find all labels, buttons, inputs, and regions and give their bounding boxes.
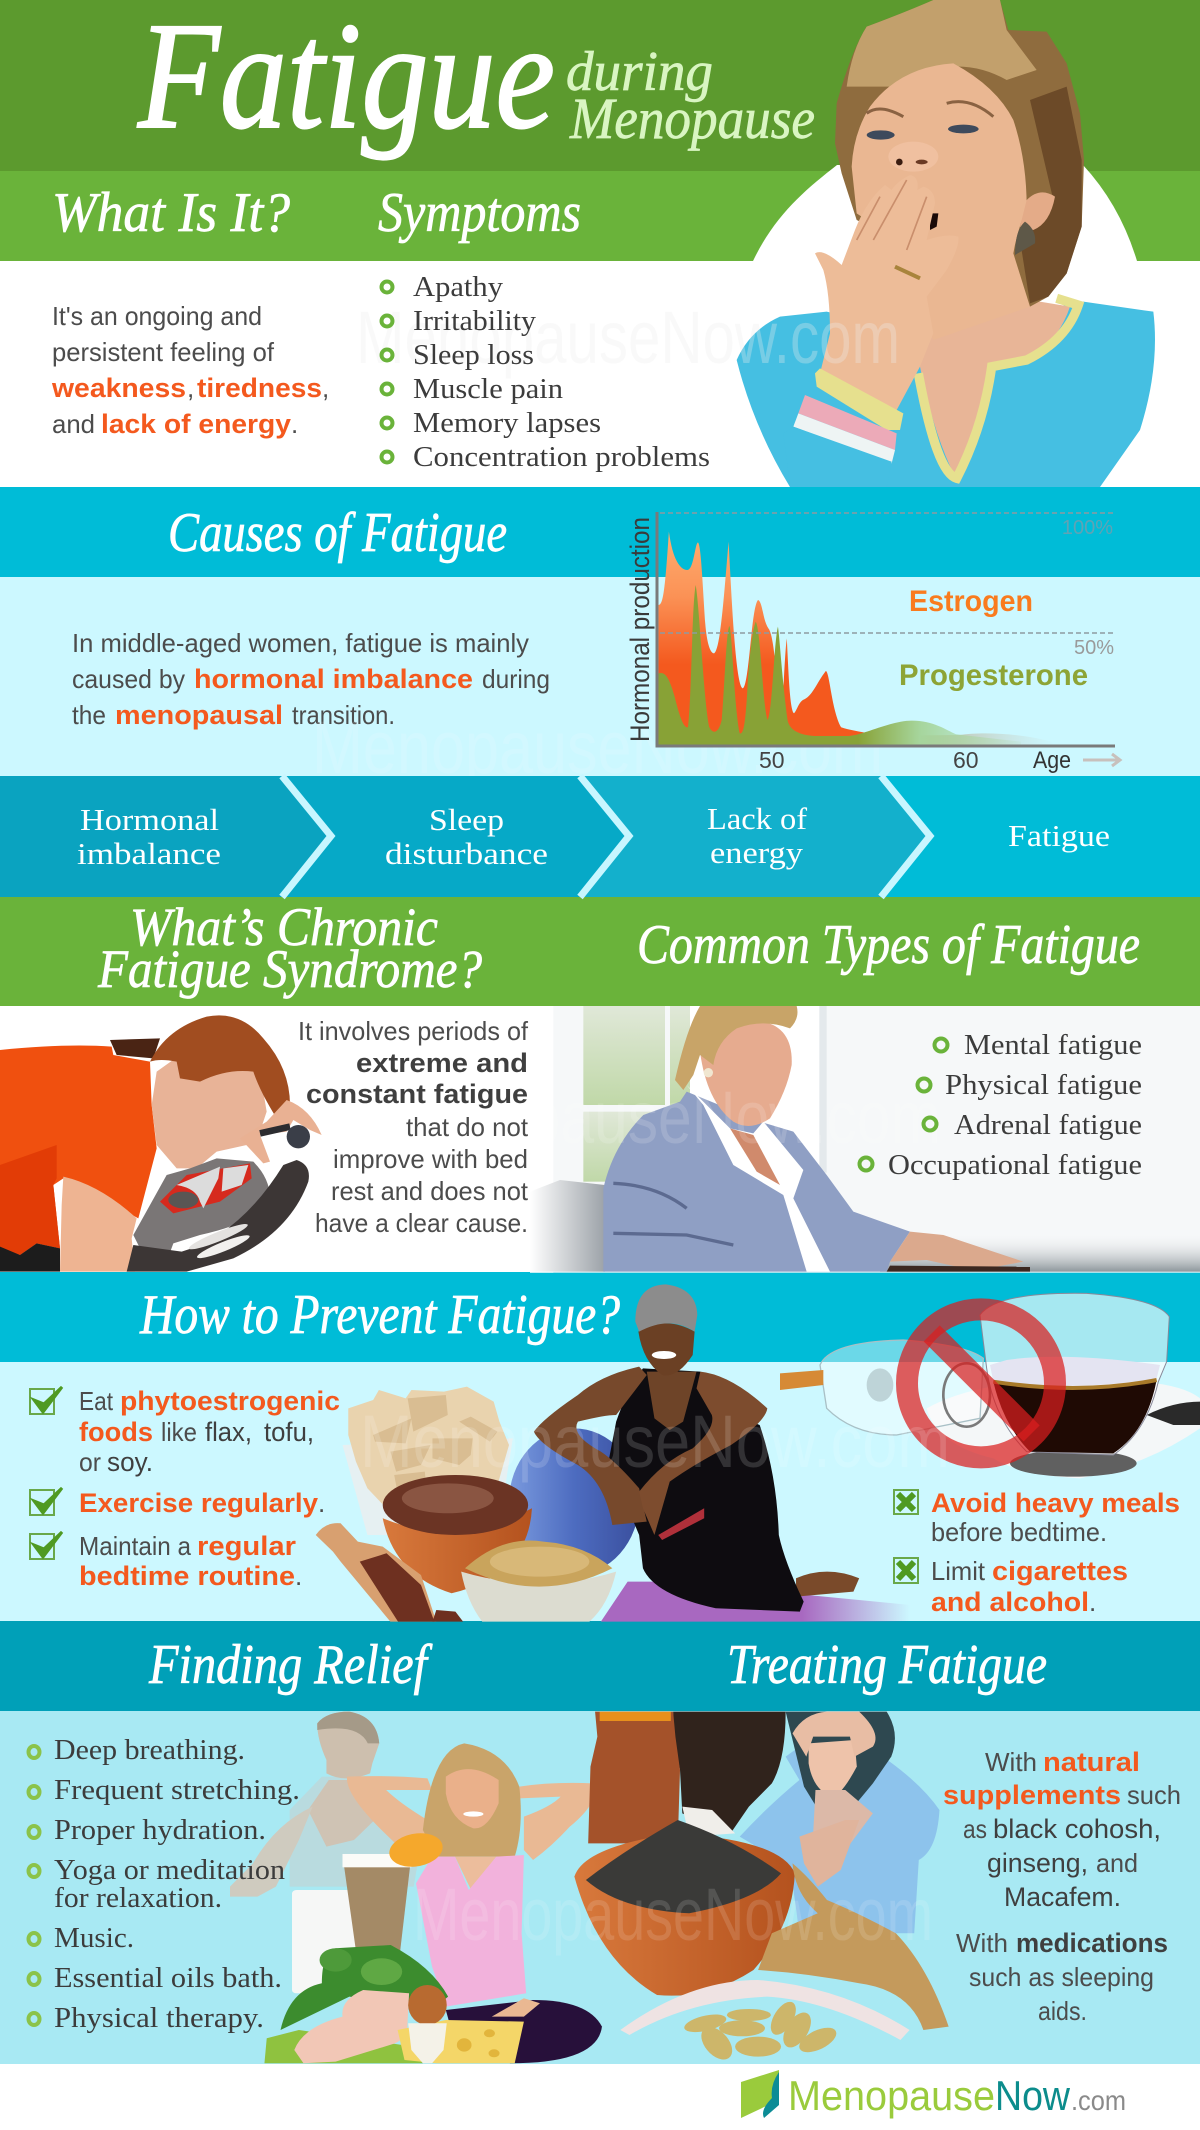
heading: causes of fatigue: Causes of Fatigue [168,502,507,564]
checklist: avoid: cigarettes [992,1556,1128,1586]
chart: hormonal production: Progesterone [899,659,1088,692]
text: causes: during [482,664,550,694]
checklist: avoid: Limit [931,1556,986,1586]
process chevrons: energy [710,835,804,870]
photo: office woman [530,1006,1200,1273]
process chevrons: imbalance [77,836,221,871]
text: treating fatigue: supplements [943,1780,1121,1810]
photo: relaxing women and food [230,1712,602,2063]
list: finding relief: Essential oils bath. [54,1962,282,1994]
logo: MenopauseNow.com [741,2070,1126,2119]
text: chronic fatigue description: It involves periods of [298,1016,529,1046]
photo: supplements and tired woman [574,1712,949,2063]
checklist: prevention: like [161,1417,197,1447]
heading: chronic fatigue syndrome: Fatigue Syndrome? [97,939,482,999]
list: types of fatigue: Mental fatigue [964,1029,1142,1061]
text: chronic fatigue description: have a clear cause. [315,1208,528,1238]
chart: hormonal production: Age [1033,747,1071,774]
list: symptoms [382,271,710,473]
heading: how to prevent: How to Prevent Fatigue? [139,1284,620,1346]
process chevrons: Sleep [429,802,504,837]
list: finding relief: Music. [54,1922,134,1954]
text: treating fatigue: such [1127,1780,1181,1810]
watermark: MenopauseNow.com [413,1873,933,1956]
list: finding relief: Deep breathing. [54,1734,245,1766]
process chevrons: disturbance [385,836,548,871]
photo: cigarette and coffee with no sign [780,1293,1200,1478]
checklist: prevention: . [295,1561,302,1591]
checklist: prevention: Maintain a [79,1531,191,1561]
text: treating fatigue: natural [1043,1747,1140,1777]
logo: MenopauseNow.com: .com [1071,2085,1126,2116]
checklist: avoid: . [1089,1587,1096,1617]
watermark: MenopauseNow.com [360,1400,950,1483]
checklist: prevention: tofu, [264,1417,314,1447]
text: chronic fatigue description [298,1016,529,1238]
list: symptoms: Memory lapses [413,407,601,439]
text: causes: hormonal imbalance [194,664,473,694]
process chevrons: Fatigue [1008,818,1110,853]
text: treating fatigue: black cohosh, [993,1814,1161,1844]
text: what is it: lack of energy [101,409,291,439]
checklist: prevention [30,1386,340,1591]
checklist: avoid: Avoid heavy meals [931,1488,1180,1518]
text: what is it: , [187,373,194,403]
heading: chronic fatigue syndrome: What’s Chronic [130,897,438,957]
process chevrons [0,776,1110,897]
watermark: MenopauseNow.com [375,1076,941,1159]
list: types of fatigue: Adrenal fatigue [954,1109,1142,1141]
text: treating fatigue: aids. [1038,1996,1087,2026]
text: chronic fatigue description: improve with bed [333,1144,528,1174]
chart: hormonal production: 50 [759,747,785,773]
text: treating fatigue: Macafem. [1004,1882,1121,1912]
chart: hormonal production: 60 [953,747,979,773]
text: treating fatigue: With [985,1747,1037,1777]
list: types of fatigue: Occupational fatigue [888,1149,1142,1181]
list: finding relief: Physical therapy. [54,2002,264,2034]
list: symptoms: Concentration problems [413,441,710,473]
text: chronic fatigue description: that do not [406,1112,529,1142]
heading: treating fatigue: Treating Fatigue [727,1634,1047,1696]
text: treating fatigue [943,1747,1181,2026]
checklist: prevention: Eat [79,1386,114,1416]
text: chronic fatigue description: rest and does not [331,1176,529,1206]
checklist: prevention: foods [79,1417,153,1447]
checklist: avoid: and alcohol [931,1587,1089,1617]
list: symptoms: Muscle pain [413,373,564,405]
checklist: avoid: before bedtime. [931,1517,1107,1547]
text: treating fatigue: such as sleeping [969,1962,1154,1992]
text: what is it: persistent feeling of [52,337,275,367]
text: treating fatigue: ginseng, [987,1848,1088,1878]
text: causes: menopausal [115,700,283,730]
photo: woman with exercise ball and foods [316,1284,910,1622]
checklist: prevention: or [79,1447,101,1477]
list: finding relief: Proper hydration. [54,1814,266,1846]
text: treating fatigue: as [963,1814,987,1844]
list: finding relief: Yoga or meditation [54,1854,286,1886]
heading: what is it: What Is It? [52,182,290,244]
text: causes: In middle-aged women, fatigue is mainly [72,628,529,658]
logo: MenopauseNow.com: Menopause [788,2072,995,2119]
photo: yawning woman [737,0,1155,487]
list: symptoms: Apathy [413,271,504,303]
text: causes: the [72,700,106,730]
title: during [566,41,713,103]
checklist: prevention: soy. [107,1447,153,1477]
list: finding relief: Frequent stretching. [54,1774,300,1806]
list: types of fatigue: Physical fatigue [945,1069,1142,1101]
watermark: MenopauseNow.com [356,296,900,379]
text: treating fatigue: medications [1016,1928,1168,1958]
photo: woman on exercise bike [0,1015,322,1272]
heading: finding relief: Finding Relief [148,1634,433,1696]
text: what is it: and [52,409,95,439]
title: Menopause [569,86,815,151]
list: symptoms: Sleep loss [413,339,534,371]
text: what is it: . [291,409,298,439]
text: what is it: tiredness [197,373,322,403]
checklist: prevention: . [318,1488,325,1518]
text: causes: caused by [72,664,185,694]
text: what is it: It's an ongoing and [52,301,262,331]
text: chronic fatigue description: constant fatigue [306,1079,528,1109]
text: what is it: weakness [51,373,186,403]
chart: hormonal production: 50% [1074,637,1114,659]
chart: hormonal production: Estrogen [909,585,1033,618]
chart: hormonal production: Hormonal production [625,517,655,742]
text: causes: transition. [292,700,395,730]
text: what is it [51,301,329,439]
checklist: prevention: phytoestrogenic [120,1386,340,1416]
list: types of fatigue [860,1029,1142,1181]
watermark: MenopauseNow.com [312,706,883,789]
chart: hormonal production [625,512,1120,774]
checklist: prevention: Exercise regularly [79,1488,318,1518]
list: finding relief: for relaxation. [54,1882,222,1914]
list: finding relief [28,1734,300,2034]
process chevrons: Lack of [707,801,808,836]
heading: chronic fatigue syndrome [97,897,482,999]
text: treating fatigue: and [1096,1848,1138,1878]
process chevrons: Hormonal [80,802,219,837]
text: treating fatigue: With [956,1928,1008,1958]
list: symptoms: Irritability [413,305,537,337]
checklist: avoid [894,1488,1180,1617]
text: what is it: , [322,373,329,403]
white arch behind portrait [753,165,1137,261]
text: causes [72,628,550,730]
checklist: prevention: regular [197,1531,297,1561]
text: chronic fatigue description: extreme and [356,1048,528,1078]
chart: hormonal production: 100% [1062,517,1113,539]
checklist: prevention: bedtime routine [79,1561,295,1591]
logo: MenopauseNow.com: Now [995,2072,1071,2119]
checklist: prevention: flax, [205,1417,252,1447]
heading: symptoms: Symptoms [378,182,581,244]
